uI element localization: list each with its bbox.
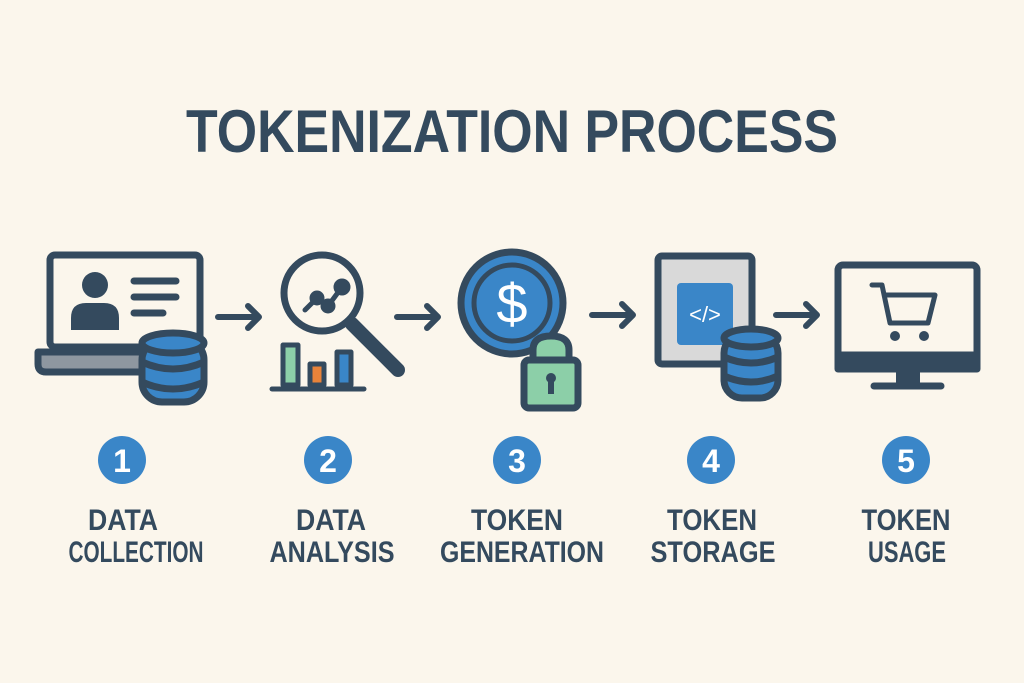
step 1: 1 xyxy=(113,443,131,479)
step 1: DATA xyxy=(88,504,158,537)
step 5: TOKEN xyxy=(862,504,950,537)
icon: magnifier with bars xyxy=(272,255,398,389)
step 1: COLLECTION xyxy=(68,536,204,569)
icon: tablet with code and database xyxy=(658,256,778,398)
step 5: USAGE xyxy=(868,536,946,569)
icon: coin with lock xyxy=(461,252,578,408)
step 3: 3 xyxy=(508,443,526,479)
step 4: STORAGE xyxy=(650,536,776,569)
arrow 3 xyxy=(592,304,633,326)
step 3: GENERATION xyxy=(440,536,604,569)
step 5 xyxy=(862,436,950,569)
step 4: TOKEN xyxy=(667,504,757,537)
arrow 2 xyxy=(397,306,438,328)
step 2: ANALYSIS xyxy=(270,536,394,569)
icon: laptop with database xyxy=(38,255,204,402)
step 3 xyxy=(440,436,604,569)
icon: tablet with code and database: </> xyxy=(689,302,721,327)
step 3: TOKEN xyxy=(471,504,563,537)
step 1 xyxy=(68,436,204,569)
step 5: 5 xyxy=(897,443,915,479)
step 4 xyxy=(650,436,776,569)
icon: monitor with cart xyxy=(838,265,977,386)
title: TOKENIZATION PROCESS xyxy=(186,98,838,165)
step 2: DATA xyxy=(296,504,366,537)
arrow 4 xyxy=(776,304,817,326)
icon: coin with lock: $ xyxy=(496,272,528,335)
arrow 1 xyxy=(218,306,259,328)
step 4: 4 xyxy=(702,443,720,479)
step 2 xyxy=(270,436,394,569)
step 2: 2 xyxy=(319,443,337,479)
